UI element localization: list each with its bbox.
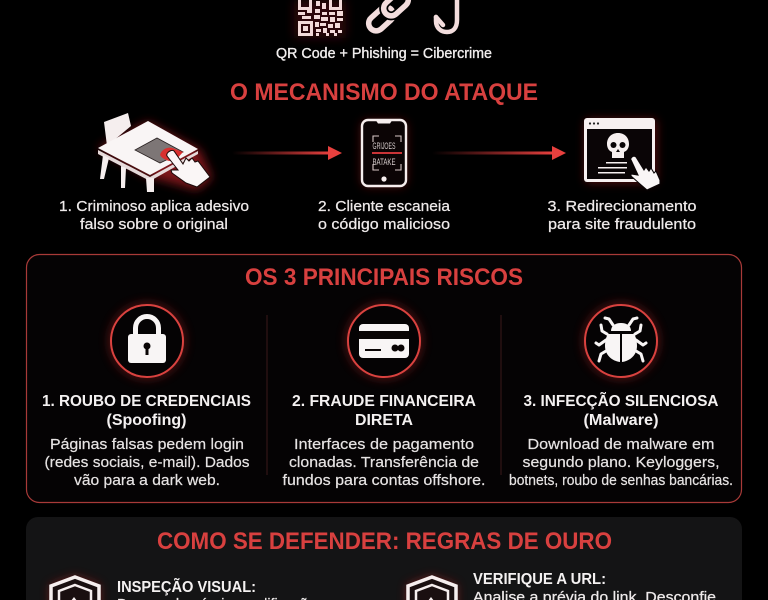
text: risk 3 heading [524, 392, 718, 429]
text: risk 1 body: (redes sociais, e-mail). Dados [44, 454, 249, 471]
text: rule 2 [473, 571, 716, 600]
arrow: step 1 to 2 [232, 146, 342, 160]
text: risk 3 heading: 3. INFECÇÃO SILENCIOSA [524, 392, 718, 410]
icon: phone scanning: BATAKE [372, 157, 396, 168]
text: risk 1 body: vão para a dark web. [74, 472, 220, 489]
arrow: step 2 to 3 [432, 146, 566, 160]
text: rule 2: VERIFIQUE A URL: [473, 571, 606, 588]
text: risk 2 heading: 2. FRAUDE FINANCEIRA [292, 393, 476, 410]
text: risk 2 body [282, 436, 486, 489]
text: risk 2 heading: DIRETA [355, 412, 413, 429]
text: risk 2 heading [292, 393, 476, 429]
text: risk 1 body: Páginas falsas pedem login [50, 436, 244, 453]
icon: phone scanning: GRIJOES [372, 141, 396, 152]
icon: padlock [109, 303, 185, 379]
icon: malware bug [583, 303, 659, 379]
icon: shield left [50, 576, 100, 600]
text: risk 3 body: Download de malware em [528, 436, 714, 453]
caption: formula: QR Code + Phishing = Cibercrime [276, 46, 492, 62]
step 3: redirect [548, 118, 696, 233]
icon: phone scanning [361, 120, 407, 187]
text: risk 1 heading: 1. ROUBO DE CREDENCIAIS [42, 393, 251, 410]
step 1: criminal applies sticker [59, 113, 249, 233]
icon: table and hand [98, 113, 212, 192]
icon: shield right [407, 576, 457, 600]
label: step 3: para site fraudulento [548, 216, 696, 233]
text: risk 1 heading: (Spoofing) [106, 412, 186, 429]
icon: chain link [366, 0, 411, 34]
text: risk 2 body: clonadas. Transferência de [289, 454, 479, 471]
heading: mechanism: O MECANISMO DO ATAQUE [230, 79, 538, 106]
icon: QR code [294, 0, 346, 38]
label: step 1: falso sobre o original [80, 216, 228, 233]
icon: credit card [346, 303, 422, 379]
text: risk 2 body: Interfaces de pagamento [294, 436, 474, 453]
panel: defense rules [26, 517, 742, 600]
label: step 3: 3. Redirecionamento [548, 198, 696, 215]
label: step 1: 1. Criminoso aplica adesivo [59, 198, 249, 215]
text: risk 1 heading [42, 393, 251, 429]
icon: malicious browser with skull [584, 118, 660, 190]
text: risk 1 body [44, 436, 249, 489]
text: risk 3 body: segundo plano. Keyloggers, [522, 454, 720, 471]
label: step 2: 2. Cliente escaneia [318, 198, 451, 215]
text: risk 2 body: fundos para contas offshore. [282, 472, 486, 489]
panel: risks [26, 254, 742, 502]
text: rule 1: INSPEÇÃO VISUAL: [117, 578, 256, 596]
label: step 2 [318, 198, 451, 233]
heading: risks: OS 3 PRINCIPAIS RISCOS [245, 264, 523, 291]
text: risk 3 body [509, 436, 733, 489]
risk 1 [42, 303, 251, 489]
rule 2: verify URL [407, 571, 716, 600]
label: step 1 [59, 198, 249, 233]
text: rule 1 [117, 578, 323, 600]
label: step 2: o código malicioso [318, 216, 450, 233]
step 2: client scans [318, 120, 451, 233]
text: risk 3 body: botnets, roubo de senhas bancárias. [509, 472, 733, 489]
label: step 3 [548, 198, 696, 233]
heading: defense: COMO SE DEFENDER: REGRAS DE OURO [157, 528, 612, 555]
text: risk 3 heading: (Malware) [584, 412, 658, 429]
risk 3 [509, 303, 733, 489]
risk 2 [282, 303, 486, 489]
rule 1: visual inspection [50, 576, 323, 600]
icon: fishing hook [436, 0, 457, 32]
